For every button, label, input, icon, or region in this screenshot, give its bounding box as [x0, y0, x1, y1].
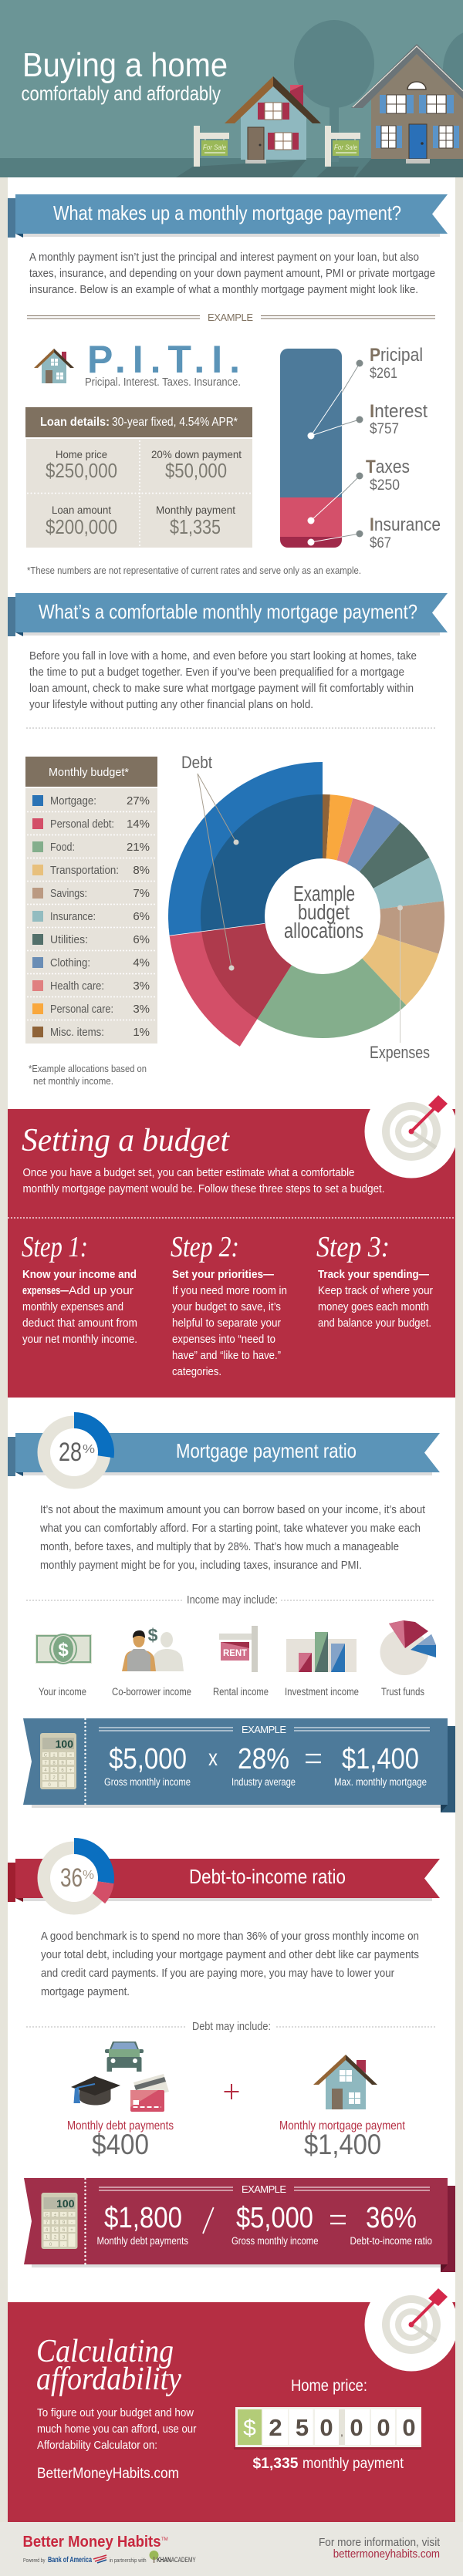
comfortable payment paragraph: Before you fall in love with a home, and even before you start looking at homes, take [29, 650, 417, 663]
icon: calculator: 9 [61, 1762, 64, 1766]
icon: calculator: ± [52, 1754, 56, 1758]
step 1: expenses— [22, 1285, 69, 1297]
row: health care: Health care: [50, 979, 104, 993]
comfortable payment paragraph [29, 650, 417, 711]
insurance label: Insurance [370, 514, 441, 535]
ratio value: Debt-to-income ratio [350, 2235, 432, 2247]
banner: debt-to-income ratio: Debt-to-income ratio [189, 1865, 346, 1888]
gross monthly income value: Gross monthly income [104, 1776, 191, 1788]
step 2: If you need more room in [172, 1285, 287, 1297]
step 1: Step 1: [22, 1231, 88, 1263]
step 2: have” and “like to have.” [172, 1350, 281, 1362]
row: food: 21% [127, 841, 150, 854]
icon: calculator: 100 [56, 1738, 73, 1750]
multiply sign: x [208, 1745, 218, 1771]
icon: PITI house [34, 349, 74, 383]
loan details table: 30-year fixed, 4.54% APR* [112, 416, 238, 429]
icon: your income: Your income [39, 1686, 86, 1698]
home price counter: 0 [350, 2414, 363, 2441]
home price counter: 0 [402, 2414, 416, 2441]
icon: graduation cap [71, 2076, 120, 2106]
panel: setting a budget [8, 1084, 458, 1398]
icon: calculator: + [69, 1768, 73, 1773]
PITI stacked bar chart [280, 345, 441, 551]
home price [46, 448, 117, 482]
debt callout: Debt [181, 753, 212, 772]
monthly payment: Monthly payment [156, 504, 235, 516]
banner: mortgage payment ratio [8, 1412, 440, 1489]
row: utilities: Utilities: [50, 933, 88, 946]
plus sign [224, 2084, 239, 2099]
row: food [32, 841, 150, 854]
row: savings: 7% [133, 887, 150, 900]
36% donut [37, 1838, 114, 1914]
for sale sign left: For Sale [203, 143, 226, 151]
monthly budget table: Monthly budget* [49, 766, 129, 779]
home price counter: $ [243, 2416, 256, 2441]
equals sign [306, 1755, 321, 1762]
down payment: 20% down payment [151, 448, 242, 460]
donut centre label: Example [293, 882, 355, 905]
icon: calculator: . [63, 2243, 65, 2247]
row: transportation [32, 864, 150, 877]
icon: calculator: - [71, 2221, 73, 2226]
icon: mortgage house [313, 2055, 377, 2109]
visit text: For more information, visit [319, 2537, 440, 2549]
icon: calculator: C [45, 2214, 49, 2218]
insurance label: $67 [370, 535, 391, 551]
28% donut: 28 [59, 1438, 82, 1467]
monthly budget table [25, 757, 157, 1044]
row: misc items: Misc. items: [50, 1026, 104, 1039]
debt-to-income paragraph [41, 1930, 419, 1998]
comfortable payment paragraph: your lifestyle without putting any other financial plans on hold. [29, 699, 313, 711]
icon: calculator: . [62, 1783, 63, 1788]
calculator text: Affordability Calculator on: [37, 2439, 157, 2452]
36% donut: % [83, 1869, 94, 1882]
step 2 [171, 1231, 287, 1378]
title: Buying a home [22, 46, 228, 84]
row: personal debt: 14% [127, 818, 150, 831]
step 3: and balance your budget. [318, 1317, 431, 1330]
intro paragraph: insurance. Below is an example of what a monthly mortgage payment might look like. [29, 284, 418, 296]
max monthly mortgage value: $1,400 [342, 1743, 419, 1775]
step 1: Add up your [69, 1285, 133, 1297]
monthly debt payments value: $400 [92, 2129, 149, 2160]
taxes label [366, 457, 410, 494]
icon: calculator: 1 [46, 2235, 49, 2240]
28% donut: % [83, 1443, 95, 1456]
step 2: Step 2: [171, 1231, 239, 1263]
row: clothing [32, 956, 150, 969]
icon: calculator: C [44, 1754, 48, 1758]
icon: calculator: 5 [54, 2228, 57, 2233]
mortgage ratio paragraph [39, 1504, 425, 1572]
icon: calculator: 100 [56, 2197, 75, 2210]
icon: rental income [213, 1626, 269, 1698]
icon: rental income: RENT [223, 1647, 248, 1658]
gross income value [231, 2202, 318, 2247]
row: savings [32, 887, 150, 900]
icon: target [364, 1095, 455, 1178]
step 2: expenses into “need to [172, 1334, 275, 1346]
visit text [319, 2537, 440, 2561]
step 1: your net monthly income. [22, 1334, 137, 1346]
gross income value: Gross monthly income [231, 2235, 318, 2247]
row: health care: 3% [133, 979, 150, 993]
powered by line: in partnership with [110, 2558, 147, 2564]
row: mortgage: Mortgage: [50, 794, 96, 808]
step 3: Track your spending— [318, 1269, 429, 1281]
row: health care [32, 979, 150, 993]
icon: calculator: 7 [44, 1762, 47, 1766]
loan amount [46, 504, 117, 538]
interest label: $757 [370, 421, 399, 437]
debt-to-income paragraph: your total debt, including your mortgage payment and other debt like car payments [41, 1949, 419, 1961]
loan amount: Loan amount [52, 504, 111, 516]
monthly payment result [253, 2456, 404, 2472]
donut centre label [284, 882, 363, 942]
banner: debt-to-income ratio [8, 1838, 440, 1914]
powered by line: KHANACADEMY [157, 2556, 196, 2564]
icon: calculator: 2 [52, 1775, 56, 1780]
logo: Better Money Habits: TM [161, 2537, 168, 2542]
ratio value [350, 2202, 432, 2247]
panel: debt-to-income example [24, 2178, 455, 2272]
taxes label: $250 [370, 477, 400, 494]
powered by line [23, 2551, 196, 2564]
row: insurance: 6% [133, 910, 150, 923]
PITI subtitle: Pricipal. Interest. Taxes. Insurance. [85, 376, 241, 389]
28% donut [37, 1412, 114, 1489]
step 1 [22, 1231, 137, 1346]
step 2: your budget to save, it’s [172, 1301, 281, 1313]
monthly mortgage payment value: Monthly mortgage payment [279, 2119, 406, 2133]
home price counter: 0 [377, 2414, 390, 2441]
header illustration [0, 0, 463, 177]
icon: co-borrower income [112, 1625, 191, 1698]
icon: co-borrower income: Co-borrower income [112, 1686, 191, 1698]
principal label: $261 [370, 366, 397, 382]
row: misc items [32, 1026, 150, 1039]
subtitle: comfortably and affordably [22, 82, 221, 105]
income may include divider: Income may include: [187, 1594, 278, 1607]
small house [225, 76, 321, 164]
icon: calculator: × [69, 1754, 73, 1758]
icon: investment income [285, 1632, 359, 1698]
interest label [370, 401, 428, 437]
mortgage ratio paragraph: month, before taxes, and multiply that by 28%. That’s how much a manageable [40, 1541, 399, 1553]
heading: affordability [36, 2362, 181, 2397]
step 1: Know your income and [22, 1269, 137, 1281]
loan details table [25, 407, 252, 548]
down payment: $50,000 [165, 459, 227, 482]
home price label: Home price: [291, 2377, 367, 2395]
icon: calculator: - [69, 1762, 71, 1766]
calculator text [37, 2407, 197, 2452]
row: mortgage [32, 794, 150, 808]
example label [99, 2183, 430, 2195]
row: savings: Savings: [50, 887, 87, 900]
intro paragraph: A monthly payment isn’t just the principal and interest payment on your loan, but also [29, 251, 419, 264]
heading [36, 2334, 181, 2397]
monthly mortgage payment value: $1,400 [304, 2129, 381, 2160]
step 2: categories. [172, 1366, 221, 1378]
icon: calculator: 7 [46, 2221, 49, 2226]
icon: calculator [42, 2193, 77, 2249]
row: insurance [32, 910, 150, 923]
calculator link: BetterMoneyHabits.com [37, 2466, 179, 2482]
icon: calculator: 4 [46, 2228, 49, 2233]
step 3: Step 3: [316, 1231, 390, 1263]
budget footnote [29, 1063, 147, 1087]
step 3: Keep track of where your [318, 1285, 433, 1297]
industry average value [231, 1743, 296, 1788]
example label: EXAMPLE [242, 1724, 286, 1735]
row: mortgage: 27% [127, 794, 150, 808]
budget allocation donut chart [168, 753, 444, 1062]
icon: your income: $ [58, 1640, 69, 1661]
step 3 [316, 1231, 433, 1330]
footer [0, 2522, 463, 2576]
icon: target [364, 2288, 455, 2371]
home price counter: 0 [319, 2414, 333, 2441]
industry average value: Industry average [231, 1776, 296, 1788]
max monthly mortgage value: Max. monthly mortgage [334, 1776, 427, 1788]
loan details table: Loan details: [40, 416, 110, 429]
banner: comfortable monthly mortgage payment [8, 593, 448, 636]
home price counter: , [340, 2426, 343, 2438]
monthly debt value: Monthly debt payments [97, 2235, 188, 2247]
icon: calculator: 6 [61, 1768, 64, 1773]
step 2: helpful to separate your [172, 1317, 281, 1330]
step 3: money goes each month [318, 1301, 429, 1313]
budget footnote: net monthly income. [33, 1075, 113, 1087]
interest label: Interest [370, 401, 428, 422]
icon: calculator: 9 [63, 2221, 66, 2226]
icon: co-borrower income: $ [148, 1625, 158, 1645]
visit text: bettermoneyhabits.com [333, 2547, 440, 2561]
step 1: deduct that amount from [22, 1317, 137, 1330]
icon: calculator: 4 [44, 1768, 47, 1773]
icon: calculator: ÷ [61, 1754, 64, 1758]
panel: mortgage ratio example [23, 1718, 455, 1812]
donut centre label: budget [298, 900, 350, 924]
intro text: monthly mortgage payment would be. Follow these three steps to set a budget. [23, 1183, 384, 1195]
equals sign [330, 2216, 346, 2224]
row: utilities [32, 933, 150, 946]
icon: rental income: Rental income [213, 1686, 269, 1698]
icon: calculator: 6 [63, 2228, 66, 2233]
home price counter [234, 2407, 421, 2450]
step 2: Set your priorities— [172, 1269, 274, 1281]
PITI heading: P.I.T.I. [87, 338, 240, 381]
gross monthly income value: $5,000 [109, 1743, 187, 1775]
icon: calculator: + [70, 2228, 73, 2233]
row: personal debt: Personal debt: [50, 818, 114, 831]
home price: Home price [56, 448, 107, 460]
row: personal care: 3% [133, 1003, 150, 1016]
comfortable payment paragraph: loan amount, check to make sure what mortgage payment will fit comfortably within [29, 683, 414, 695]
monthly mortgage payment value [279, 2119, 406, 2160]
mortgage ratio paragraph: It’s not about the maximum amount you can borrow based on your income, it’s about [40, 1504, 425, 1516]
home price: $250,000 [46, 459, 117, 482]
row: misc items: 1% [133, 1026, 150, 1039]
monthly payment [156, 504, 235, 538]
panel: calculating affordability [8, 2278, 458, 2522]
donut centre label: allocations [284, 919, 363, 942]
for sale sign right [325, 126, 360, 167]
icon: calculator: 8 [52, 1762, 56, 1766]
monthly debt value [97, 2202, 188, 2247]
example divider [27, 312, 435, 323]
max monthly mortgage value [334, 1743, 427, 1788]
mortgage ratio paragraph: monthly payment might be for you, including taxes, insurance and PMI. [40, 1559, 362, 1572]
row: transportation: 8% [133, 864, 150, 877]
row: clothing: 4% [133, 956, 150, 969]
home price counter: 2 [269, 2414, 282, 2441]
for sale sign left [194, 126, 229, 167]
36% donut: 36 [60, 1863, 83, 1893]
taxes label: Taxes [366, 457, 410, 477]
budget footnote: *Example allocations based on [29, 1063, 147, 1074]
banner: mortgage payment ratio: Mortgage payment ratio [176, 1439, 357, 1462]
logo: Better Money Habits: Better Money Habits [23, 2534, 161, 2551]
principal label: Pricipal [370, 345, 423, 366]
row: utilities: 6% [133, 933, 150, 946]
gross monthly income value [104, 1743, 191, 1788]
powered by line: Bank of America [48, 2556, 92, 2564]
mortgage ratio paragraph: what you can comfortably afford. For a starting point, take whatever you make each [39, 1522, 421, 1535]
icon: calculator: 8 [54, 2221, 57, 2226]
icon: calculator: 0 [48, 1783, 51, 1788]
industry average value: 28% [238, 1743, 289, 1775]
debt-to-income paragraph: A good benchmark is to spend no more than 36% of your gross monthly income on [41, 1930, 419, 1943]
powered by line: Powered by [23, 2558, 46, 2564]
icon: trust funds: Trust funds [381, 1686, 424, 1698]
row: clothing: Clothing: [50, 956, 90, 969]
icon: calculator: ± [54, 2214, 57, 2218]
icon: calculator: 5 [52, 1768, 56, 1773]
banner: what makes up a monthly mortgage payment: What makes up a monthly mortgage payment? [53, 201, 401, 224]
expenses callout [370, 905, 430, 1062]
icon: your income [35, 1634, 92, 1698]
loan amount: $200,000 [46, 515, 117, 538]
step 1: monthly expenses and [22, 1301, 123, 1313]
icon: trust funds [380, 1620, 436, 1698]
monthly debt payments value: Monthly debt payments [67, 2119, 174, 2133]
icon: calculator: 2 [54, 2235, 57, 2240]
icon: calculator: × [70, 2214, 73, 2218]
intro paragraph [29, 251, 435, 296]
insurance label [370, 514, 441, 551]
monthly debt value: $1,800 [104, 2202, 182, 2234]
monthly payment result: monthly payment [302, 2456, 404, 2472]
divide slash [203, 2207, 214, 2234]
icon: calculator: ÷ [63, 2214, 66, 2218]
monthly payment result: $1,335 [253, 2456, 299, 2472]
home price counter: 5 [296, 2414, 309, 2441]
icon: calculator: 3 [63, 2235, 66, 2240]
banner: what makes up a monthly mortgage payment [8, 194, 448, 238]
icon: calculator: 3 [61, 1775, 64, 1780]
heading: Setting a budget [22, 1123, 230, 1158]
big house [351, 44, 463, 164]
principal label [370, 345, 423, 382]
calculator text: much home you can afford, use our [37, 2423, 197, 2436]
example label [99, 1724, 430, 1735]
monthly debt payments value [67, 2119, 174, 2160]
icon: car [105, 2042, 144, 2072]
footnote: *These numbers are not representative of current rates and serve only as an example. [27, 565, 361, 576]
intro text [23, 1167, 384, 1195]
intro paragraph: taxes, insurance, and depending on your down payment amount, PMI or private mortgage [29, 268, 435, 280]
row: personal care [32, 1003, 150, 1016]
down payment [151, 448, 242, 482]
row: insurance: Insurance: [50, 910, 96, 923]
comfortable payment paragraph: the time to put a budget together. Even if you’ve been prequalified for a mortgage [29, 666, 404, 679]
debt-to-income paragraph: mortgage payment. [41, 1986, 130, 1998]
calculator text: To figure out your budget and how [37, 2407, 194, 2419]
ratio value: 36% [366, 2202, 417, 2234]
icon: calculator: 1 [44, 1775, 47, 1780]
example label: EXAMPLE [242, 2183, 286, 2195]
expenses callout: Expenses [370, 1043, 430, 1062]
debt may include divider: Debt may include: [192, 2021, 271, 2033]
heading: Calculating [36, 2334, 174, 2369]
monthly payment: $1,335 [170, 515, 221, 538]
row: transportation: Transportation: [50, 864, 119, 877]
icon: credit cards [130, 2074, 169, 2112]
example divider: EXAMPLE [208, 312, 253, 323]
icon: calculator [40, 1733, 76, 1789]
debt-to-income paragraph: and credit card payments. If you are paying more, you may have to lower your [41, 1967, 394, 1980]
row: food: Food: [50, 841, 75, 854]
for sale sign right: For Sale [334, 143, 357, 151]
debt callout [181, 753, 239, 970]
icon: calculator: 0 [49, 2243, 52, 2247]
icon: investment income: Investment income [285, 1686, 359, 1698]
row: personal debt [32, 818, 150, 831]
intro text: Once you have a budget set, you can better estimate what a comfortable [23, 1167, 355, 1179]
gross income value: $5,000 [236, 2202, 313, 2234]
row: personal care: Personal care: [50, 1003, 113, 1016]
